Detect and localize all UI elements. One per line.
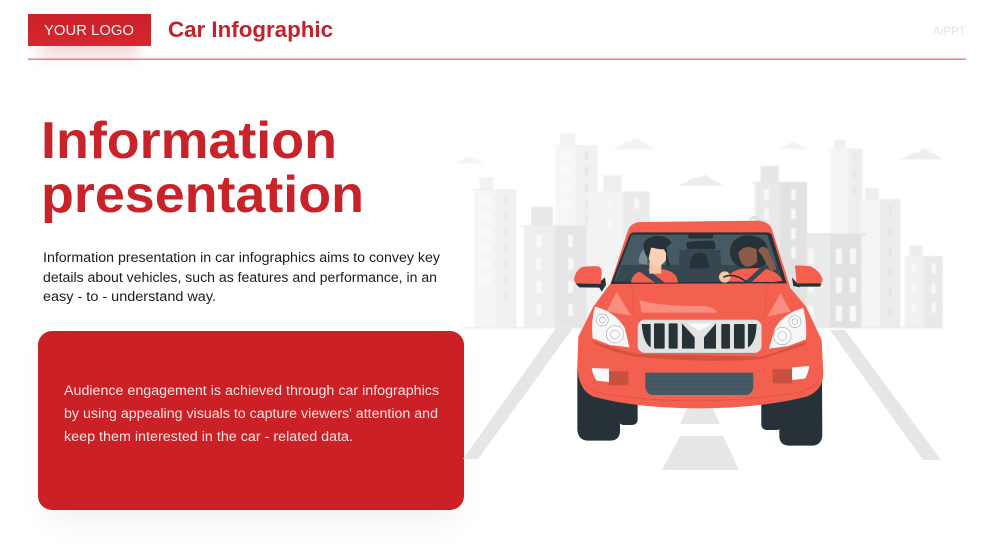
panel: audience engagement: Audience engagement is achieved through car infographics <box>64 383 439 398</box>
low right <box>807 233 866 236</box>
logo badge: YOUR LOGO <box>44 22 134 39</box>
windscreen <box>611 232 787 284</box>
fog lamps <box>592 368 609 382</box>
windows <box>536 199 639 316</box>
driver <box>719 235 783 283</box>
tall right <box>834 140 845 149</box>
building behind car <box>603 175 622 192</box>
illustration: road <box>463 328 941 470</box>
brand mark: AiPPT <box>933 24 967 38</box>
centre dashes <box>680 404 720 424</box>
illustration: city skyline background <box>452 133 943 328</box>
hood lines <box>632 284 767 320</box>
logo badge <box>28 14 151 56</box>
tall building centre-left <box>560 133 575 146</box>
body lower <box>577 283 823 408</box>
hood highlights <box>639 300 717 313</box>
headlights <box>592 307 629 347</box>
far right <box>909 245 923 257</box>
front wheels <box>577 367 620 441</box>
intro text: Information presentation in car infographics aims to convey key <box>43 250 440 265</box>
header title: Car Infographic <box>168 17 333 42</box>
main heading: presentation <box>41 166 364 224</box>
building lower left <box>531 207 553 226</box>
faint tower windows <box>479 152 571 283</box>
passenger <box>631 236 678 283</box>
buildings right <box>761 166 779 183</box>
clouds <box>452 139 943 186</box>
illustration: red car <box>574 216 823 446</box>
mid right <box>865 188 879 200</box>
intro text <box>43 250 440 304</box>
intro text: details about vehicles, such as features and performance, in an <box>43 270 437 285</box>
grille <box>638 320 761 353</box>
intro text: easy - to - understand way. <box>43 289 216 304</box>
header <box>28 14 967 60</box>
mirrors <box>598 277 606 292</box>
left road edge <box>463 328 573 459</box>
panel: audience engagement: by using appealing visuals to capture viewers' attention and <box>64 406 438 421</box>
rear wheels <box>618 397 638 425</box>
building left <box>479 177 493 190</box>
main heading: Information <box>41 112 337 170</box>
right windows <box>764 189 936 321</box>
panel: audience engagement: keep them interested in the car - related data. <box>64 429 353 444</box>
bumper shading <box>590 341 807 361</box>
roof and pillars <box>610 221 790 287</box>
right road edge <box>830 330 941 460</box>
lower air intake <box>645 373 753 395</box>
main heading <box>41 112 364 224</box>
panel: audience engagement <box>38 331 464 520</box>
